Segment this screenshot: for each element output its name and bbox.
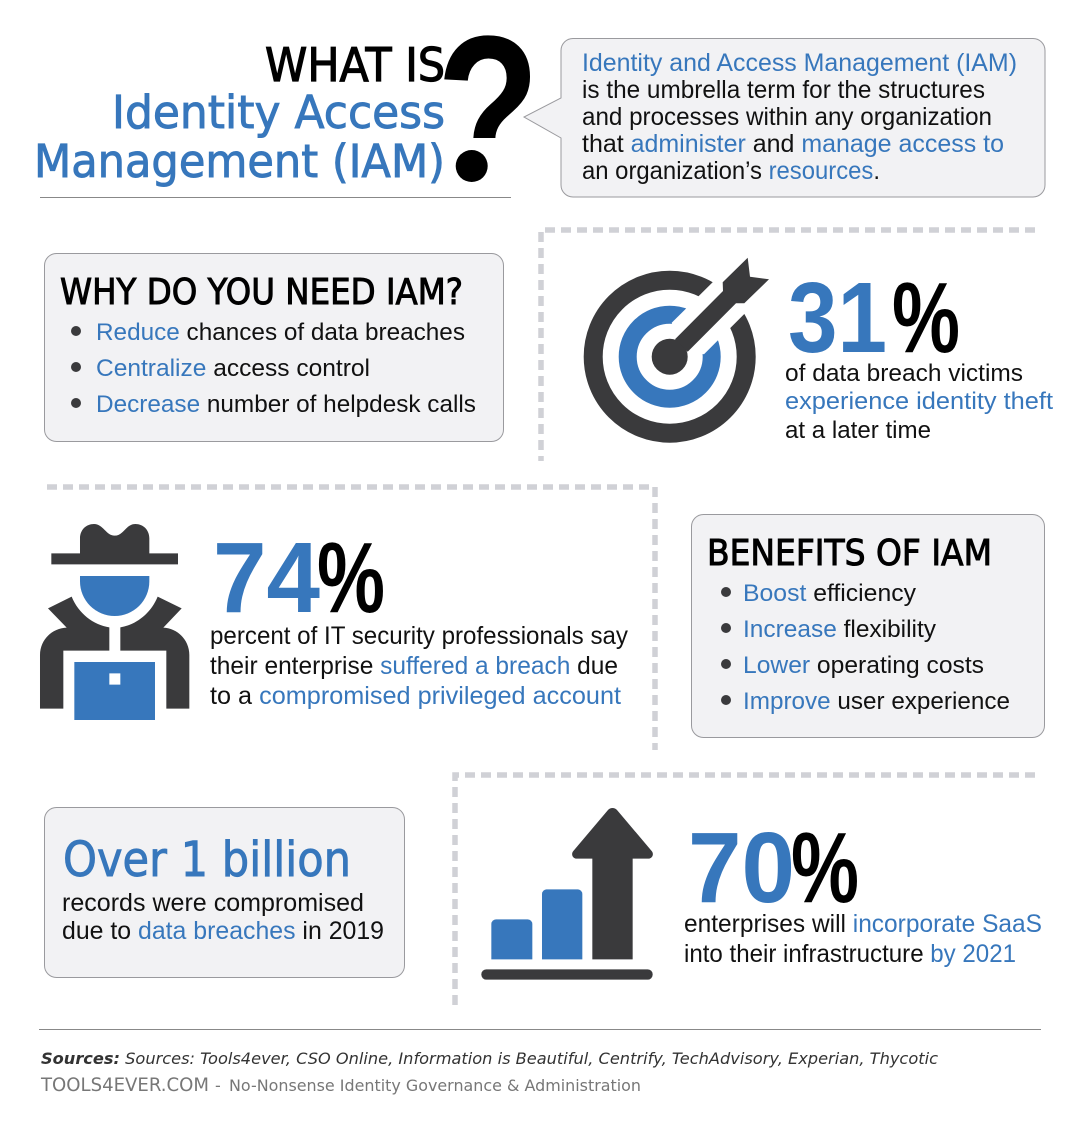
panel: benefits of IAM: Boost efficiency — [743, 580, 916, 607]
icon: hacker with laptop — [40, 524, 189, 720]
panel: benefits of IAM: BENEFITS OF IAM — [707, 533, 992, 574]
callout: IAM definition: Identity and Access Management (IAM) — [582, 49, 1017, 77]
callout: IAM definition: and processes within any organization — [582, 103, 992, 131]
icon: bar chart with rising arrow — [481, 808, 653, 980]
callout: IAM definition: that administer and manage access to — [582, 130, 1004, 158]
stat: 70 percent: enterprises will incorporate SaaS — [684, 910, 1042, 938]
panel: why do you need IAM: Reduce chances of data breaches — [96, 319, 465, 346]
footer: sources and branding: Sources: Sources: Tools4ever, CSO Online, Information is Beautiful, Centrify, TechAdvisory, Experian, Thycotic — [41, 1049, 938, 1068]
panel: benefits of IAM: Increase flexibility — [743, 616, 936, 643]
stat: 31 percent: of data breach victims — [785, 360, 1023, 387]
stat: 70 percent: 70 — [688, 812, 795, 924]
panel: benefits of IAM: Improve user experience — [743, 688, 1010, 715]
title — [34, 38, 445, 188]
callout: IAM definition: is the umbrella term for the structures — [582, 76, 985, 104]
panel: benefits of IAM: Lower operating costs — [743, 652, 984, 679]
stat: 31 percent: experience identity theft — [785, 388, 1053, 415]
stat: 74 percent: % — [317, 522, 385, 634]
panel: over 1 billion records — [44, 808, 404, 978]
panel: over 1 billion records: Over 1 billion — [63, 832, 351, 888]
callout: IAM definition — [524, 38, 1045, 197]
stat: 31 percent: % — [892, 262, 960, 374]
stat: 70 percent: into their infrastructure by 2021 — [684, 940, 1016, 968]
panel: why do you need IAM: Centralize access control — [96, 355, 370, 382]
stat: 74 percent — [210, 522, 628, 710]
stat: 70 percent — [684, 812, 1042, 968]
panel: benefits of IAM — [692, 514, 1044, 738]
stat: 70 percent: % — [791, 812, 859, 924]
footer: sources and branding: - — [215, 1076, 221, 1095]
stat: 74 percent: percent of IT security professionals say — [210, 622, 628, 650]
stat: 31 percent: at a later time — [785, 417, 931, 444]
footer: sources and branding — [40, 1049, 938, 1096]
stat: 74 percent: their enterprise suffered a breach due — [210, 652, 618, 680]
panel: why do you need IAM: WHY DO YOU NEED IAM? — [60, 272, 463, 313]
callout: IAM definition: an organization’s resources. — [582, 157, 880, 185]
icon: target with arrow — [593, 258, 769, 433]
stat: 74 percent: 74 — [213, 522, 320, 634]
panel: over 1 billion records: due to data breaches in 2019 — [62, 917, 384, 945]
footer: sources and branding: No-Nonsense Identity Governance & Administration — [229, 1076, 641, 1095]
title: Management (IAM) — [34, 135, 445, 188]
footer: sources and branding: TOOLS4EVER.COM — [40, 1074, 209, 1096]
panel: over 1 billion records: records were compromised — [62, 889, 364, 917]
title: Identity Access — [112, 86, 445, 139]
stat: 31 percent: 31 — [788, 262, 887, 374]
stat: 74 percent: to a compromised privileged account — [210, 682, 621, 710]
panel: why do you need IAM: Decrease number of helpdesk calls — [96, 391, 476, 418]
stat: 31 percent — [785, 262, 1053, 444]
panel: why do you need IAM — [44, 254, 504, 442]
title: WHAT IS — [265, 38, 445, 92]
